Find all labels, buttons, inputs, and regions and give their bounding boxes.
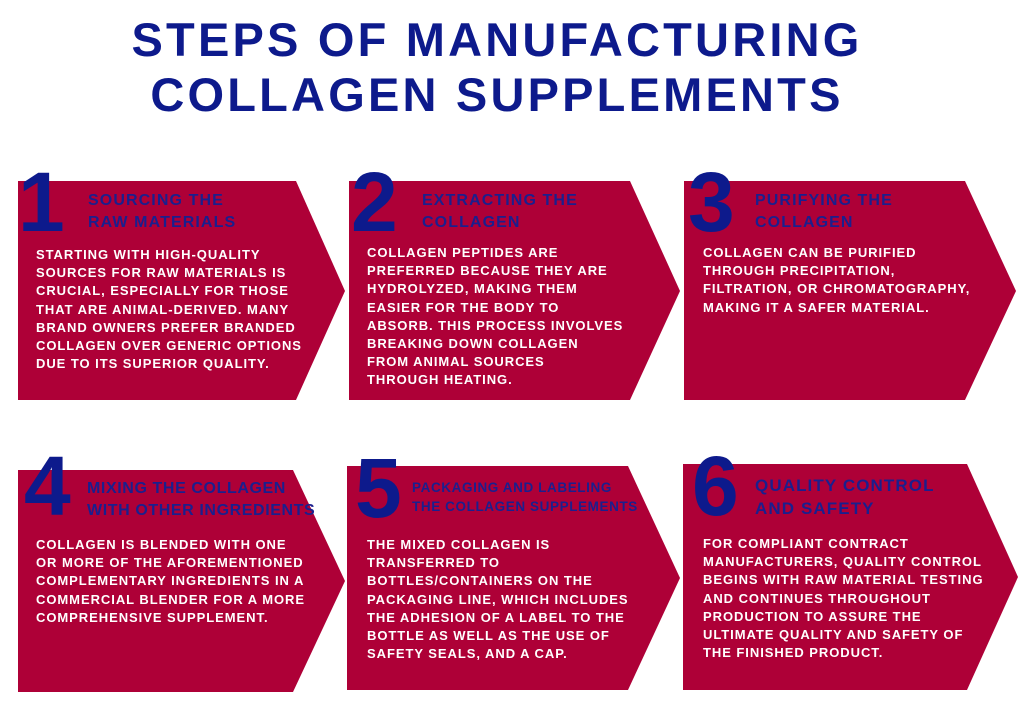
body 5: PACKAGING LINE, WHICH INCLUDES xyxy=(367,592,629,607)
panel 5 xyxy=(355,441,638,661)
body 4: COLLAGEN IS BLENDED WITH ONE xyxy=(36,537,286,552)
body 5: THE MIXED COLLAGEN IS xyxy=(367,537,550,552)
body 4: COMPREHENSIVE SUPPLEMENT. xyxy=(36,610,269,625)
body 5: THE ADHESION OF A LABEL TO THE xyxy=(367,610,625,625)
heading 5: PACKAGING AND LABELING xyxy=(412,480,612,495)
heading 2 xyxy=(422,192,578,231)
number 6: 6 xyxy=(692,439,739,533)
body 2: ABSORB. THIS PROCESS INVOLVES xyxy=(367,318,623,333)
heading 4: WITH OTHER INGREDIENTS xyxy=(87,502,315,519)
body 2: PREFERRED BECAUSE THEY ARE xyxy=(367,263,608,278)
title xyxy=(131,13,863,121)
body 2: COLLAGEN PEPTIDES ARE xyxy=(367,245,558,260)
body 3: THROUGH PRECIPITATION, xyxy=(703,263,895,278)
body 4 xyxy=(36,537,305,625)
body 1: DUE TO ITS SUPERIOR QUALITY. xyxy=(36,356,270,371)
body 6: FOR COMPLIANT CONTRACT xyxy=(703,536,909,551)
heading 2: EXTRACTING THE xyxy=(422,192,578,209)
number 4: 4 xyxy=(24,439,71,533)
body 3: FILTRATION, OR CHROMATOGRAPHY, xyxy=(703,281,970,296)
body 2: BREAKING DOWN COLLAGEN xyxy=(367,336,579,351)
panel 3 xyxy=(688,155,970,315)
body 1: BRAND OWNERS PREFER BRANDED xyxy=(36,320,296,335)
body 2 xyxy=(367,245,623,387)
body 5: TRANSFERRED TO xyxy=(367,555,500,570)
heading 3: COLLAGEN xyxy=(755,214,854,231)
heading 1: SOURCING THE xyxy=(88,192,224,209)
body 1: THAT ARE ANIMAL-DERIVED. MANY xyxy=(36,302,289,317)
heading 1 xyxy=(88,192,236,231)
panel 4 xyxy=(24,439,315,625)
body 4: OR MORE OF THE AFOREMENTIONED xyxy=(36,555,304,570)
panel 1 xyxy=(18,155,302,371)
body 1: COLLAGEN OVER GENERIC OPTIONS xyxy=(36,338,302,353)
heading 4 xyxy=(87,480,315,519)
body 6: ULTIMATE QUALITY AND SAFETY OF xyxy=(703,627,963,642)
number 3: 3 xyxy=(688,155,735,249)
body 5: SAFETY SEALS, AND A CAP. xyxy=(367,646,568,661)
body 4: COMMERCIAL BLENDER FOR A MORE xyxy=(36,592,305,607)
heading 6 xyxy=(755,476,935,518)
number 2: 2 xyxy=(351,155,398,249)
body 6 xyxy=(703,536,984,660)
heading 5 xyxy=(412,480,638,514)
heading 6: AND SAFETY xyxy=(755,499,875,518)
body 5: BOTTLE AS WELL AS THE USE OF xyxy=(367,628,610,643)
body 2: FROM ANIMAL SOURCES xyxy=(367,354,545,369)
heading 4: MIXING THE COLLAGEN xyxy=(87,480,286,497)
heading 6: QUALITY CONTROL xyxy=(755,476,935,495)
body 2: EASIER FOR THE BODY TO xyxy=(367,300,559,315)
body 5: BOTTLES/CONTAINERS ON THE xyxy=(367,573,593,588)
title: COLLAGEN SUPPLEMENTS xyxy=(150,68,844,121)
panel 6 xyxy=(692,439,984,660)
body 1: STARTING WITH HIGH-QUALITY xyxy=(36,247,260,262)
body 6: AND CONTINUES THROUGHOUT xyxy=(703,591,931,606)
body 5 xyxy=(367,537,629,661)
body 6: BEGINS WITH RAW MATERIAL TESTING xyxy=(703,572,984,587)
heading 3: PURIFYING THE xyxy=(755,192,893,209)
title: STEPS OF MANUFACTURING xyxy=(131,13,863,66)
body 3 xyxy=(703,245,970,315)
body 6: PRODUCTION TO ASSURE THE xyxy=(703,609,922,624)
panel 2 xyxy=(351,155,623,387)
body 1: CRUCIAL, ESPECIALLY FOR THOSE xyxy=(36,283,289,298)
heading 3 xyxy=(755,192,893,231)
number 5: 5 xyxy=(355,441,402,535)
body 2: HYDROLYZED, MAKING THEM xyxy=(367,281,578,296)
heading 2: COLLAGEN xyxy=(422,214,521,231)
heading 5: THE COLLAGEN SUPPLEMENTS xyxy=(412,499,638,514)
body 4: COMPLEMENTARY INGREDIENTS IN A xyxy=(36,573,304,588)
body 1 xyxy=(36,247,302,371)
heading 1: RAW MATERIALS xyxy=(88,214,236,231)
body 6: THE FINISHED PRODUCT. xyxy=(703,645,883,660)
body 2: THROUGH HEATING. xyxy=(367,372,513,387)
body 1: SOURCES FOR RAW MATERIALS IS xyxy=(36,265,286,280)
number 1: 1 xyxy=(18,155,65,249)
body 3: MAKING IT A SAFER MATERIAL. xyxy=(703,300,930,315)
body 6: MANUFACTURERS, QUALITY CONTROL xyxy=(703,554,982,569)
body 3: COLLAGEN CAN BE PURIFIED xyxy=(703,245,916,260)
